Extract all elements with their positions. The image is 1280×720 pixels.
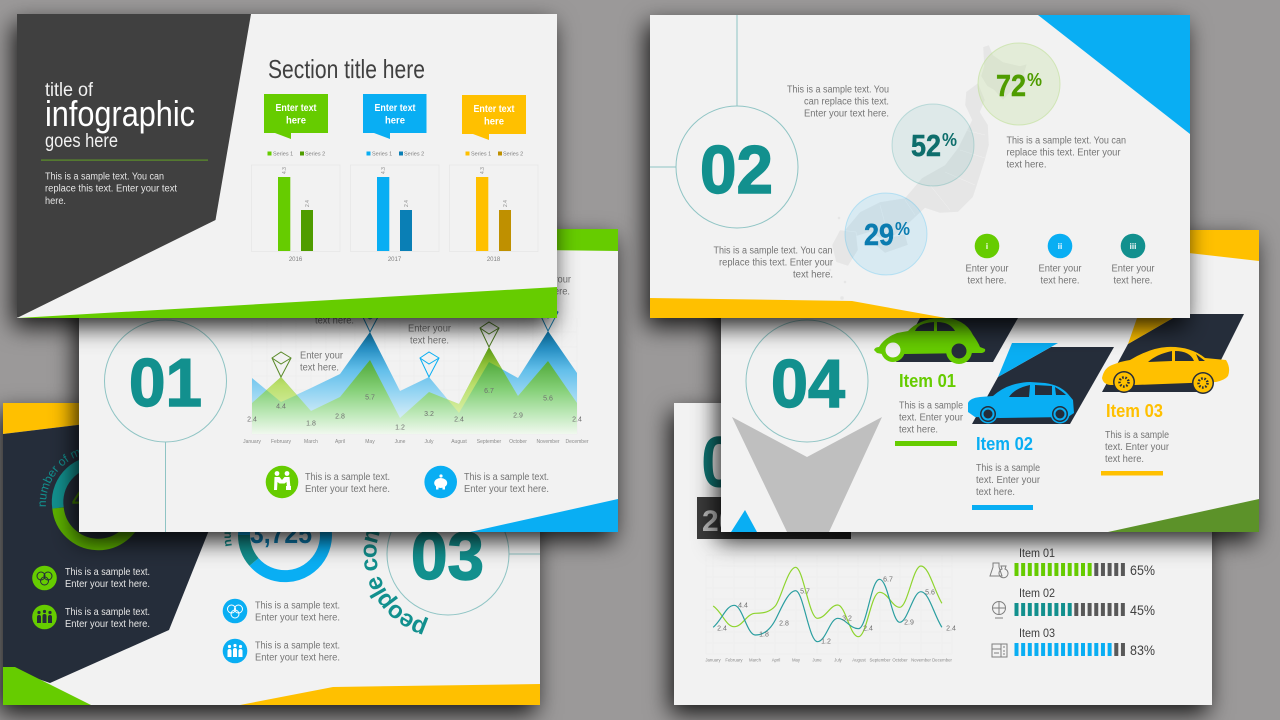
main title: title of [45, 80, 94, 101]
month axis: June [395, 439, 406, 445]
progress item 01: Item 01 [1019, 546, 1055, 560]
series: teal line [713, 579, 942, 642]
area chart [243, 318, 589, 445]
intro text: replace this text. Enter your text [45, 184, 177, 194]
item 03: text. Enter your [1105, 442, 1170, 453]
note: upper left [787, 84, 889, 120]
callout: green: Enter text [276, 103, 317, 114]
month axis: August [852, 658, 866, 662]
bar chart 2018 [450, 152, 538, 263]
value labels: 5.6 [543, 396, 553, 402]
donut: 3,725: 3,725 [250, 518, 312, 549]
bar chart 2018: Series 2 [503, 152, 523, 158]
text: members note 2: Enter your text here. [65, 619, 150, 630]
item 02 [972, 434, 1041, 510]
month axis: April [772, 658, 780, 662]
slide 05: line chart and progress items [674, 403, 1212, 705]
progress item 01 [990, 546, 1155, 578]
value labels [247, 388, 582, 432]
value labels: 5.7 [800, 588, 810, 596]
month axis: December [932, 658, 952, 662]
month axis: April [335, 439, 345, 445]
legend ii: text here. [1040, 276, 1080, 286]
intro text [45, 172, 177, 207]
icon: coins blue [223, 599, 247, 623]
month axis: October [892, 658, 908, 662]
main title [45, 80, 195, 152]
note: May: Enter your [312, 303, 356, 314]
circle badge 04: 04 [771, 346, 845, 422]
month axis [243, 439, 589, 445]
slide 04: cars [721, 230, 1259, 532]
bubble 52%: 52 [911, 128, 941, 163]
legend iii: text here. [1114, 276, 1152, 286]
value labels: 2.8 [779, 620, 789, 628]
intro text: here. [45, 196, 66, 207]
item 02: This is a sample [976, 463, 1040, 474]
progress item 03 [992, 626, 1155, 658]
legend i: i [986, 242, 988, 251]
bubble 29%: % [895, 219, 910, 239]
pin: February [272, 352, 291, 377]
progress item 02 [992, 586, 1155, 618]
note: May: text here. [315, 316, 354, 326]
icon: green car [874, 317, 985, 364]
month axis: January [243, 439, 261, 445]
value labels: 1.8 [306, 420, 316, 428]
month axis: March [304, 439, 318, 445]
yellow bottom band [650, 298, 946, 318]
blue corner [470, 499, 618, 532]
highlight: September slope [448, 347, 502, 413]
text: bottom note 1 [305, 472, 390, 495]
month axis: August [451, 439, 467, 445]
circle badge 02 [650, 15, 798, 228]
icon: yellow car [1102, 347, 1229, 394]
navy panel [3, 403, 260, 683]
icon: blue car [968, 382, 1074, 424]
item 03: text here. [1105, 454, 1144, 465]
circle badge 03: 03 [411, 518, 484, 594]
legend i: text here. [968, 276, 1006, 286]
circle badge 01: 01 [129, 345, 202, 421]
value labels: 4.4 [276, 404, 286, 410]
note: February: text here. [300, 362, 339, 374]
icon: coins green [32, 566, 57, 590]
callout: yellow [462, 95, 526, 140]
green divider [41, 160, 208, 161]
note: February [300, 350, 344, 374]
bar chart 2018: 4.3 [480, 167, 486, 174]
hidden note text: Enter your [528, 274, 572, 286]
bubble 72% [978, 43, 1060, 125]
icon: team blue [223, 639, 247, 663]
bar chart 2016: 4.3 [282, 167, 288, 174]
note: upper left: This is a sample text. You [787, 84, 889, 96]
main title: goes here [45, 131, 118, 152]
donut: 3,725 [244, 494, 326, 576]
green bottom corner [3, 667, 91, 705]
note: right: This is a sample text. You can [1006, 136, 1126, 146]
item 03: Item 03 [1106, 401, 1163, 421]
progress item 02: Item 02 [1019, 586, 1055, 600]
main title: infographic [45, 93, 195, 134]
text: customers note 2 [255, 640, 340, 664]
text: members note 1: Enter your text here. [65, 579, 150, 590]
text: customers note 1: Enter your text here. [255, 612, 340, 624]
text: customers note 2: Enter your text here. [255, 652, 340, 664]
bubble 72%: 72 [996, 68, 1026, 103]
text: customers note 1: This is a sample text. [255, 600, 340, 612]
pin: November [539, 306, 558, 331]
progress item 03: Item 03 [1019, 626, 1055, 640]
value labels [717, 576, 956, 646]
grey chevron [732, 417, 882, 532]
note: July: Enter your [408, 324, 452, 334]
note: February: Enter your [300, 350, 344, 362]
intro text: This is a sample text. You can [45, 172, 164, 182]
green corner [1108, 499, 1259, 532]
value labels: 4.4 [738, 602, 748, 610]
bar chart 2016: Series 2 [305, 152, 325, 158]
month axis: September [477, 439, 502, 445]
bar chart 2017: 2017 [388, 257, 402, 263]
slide title: infographic title and bar charts [17, 14, 557, 318]
value labels: 3.2 [842, 616, 852, 622]
text: customers note 2: This is a sample text. [255, 640, 340, 652]
text: members note 1: This is a sample text. [65, 567, 150, 578]
bar chart 2017: 2.4 [404, 200, 410, 207]
bar chart 2016: Series 1 [273, 152, 293, 158]
text: bottom note 1: This is a sample text. [305, 472, 390, 483]
callout: blue [363, 94, 426, 139]
pin: May [361, 307, 380, 332]
legend iii: Enter your [1112, 264, 1155, 274]
icon: team green [32, 605, 57, 629]
progress item 01: 65% [1130, 562, 1155, 578]
month axis: May [365, 439, 375, 445]
value labels: 1.8 [759, 632, 769, 638]
yellow top band [1180, 230, 1259, 261]
series: blue area [252, 331, 577, 434]
blue accent [998, 343, 1058, 377]
pin: July [420, 352, 439, 377]
callout: green [264, 94, 328, 139]
note: upper left: Enter your text here. [804, 108, 889, 120]
note: lower left: replace this text. Enter your [719, 258, 834, 268]
legend ii: Enter your [1038, 264, 1082, 274]
bar chart 2016 [252, 152, 340, 263]
progress item 03: 83% [1130, 642, 1155, 658]
blue triangle [731, 510, 757, 532]
month axis: February [271, 439, 291, 445]
item 01: text here. [899, 424, 938, 436]
month axis: September [869, 658, 891, 662]
legend ii: ii [1058, 242, 1062, 251]
item 01 [895, 371, 964, 446]
value labels: 2.4 [572, 416, 582, 424]
circle badge 01 [104, 320, 226, 532]
bar chart 2018: 2018 [487, 257, 501, 263]
blue corner [1038, 15, 1190, 134]
month axis: November [911, 658, 931, 662]
callout: green: here [286, 116, 306, 126]
value labels: 6.7 [484, 388, 494, 395]
parallelogram 1 [896, 318, 1018, 362]
month axis: July [425, 439, 434, 445]
pin: September [480, 322, 499, 347]
progress item 02: 45% [1130, 602, 1155, 618]
value labels: 2.4 [946, 626, 956, 632]
bar chart 2017 [350, 152, 439, 263]
circle badge 02: 02 [700, 132, 773, 208]
value labels: 5.7 [365, 394, 375, 402]
text: bottom note 2 [464, 472, 549, 495]
green bottom band [18, 287, 557, 318]
month axis: July [834, 658, 843, 662]
bar chart 2017: Series 1 [372, 152, 392, 158]
text: bottom note 2: Enter your text here. [464, 484, 549, 495]
note: lower left [714, 246, 834, 280]
donut: number of members: 4,520 [72, 487, 127, 512]
item 02: text here. [976, 487, 1015, 498]
legend i [966, 234, 1009, 286]
text: members note 2 [65, 607, 150, 630]
month axis [705, 658, 952, 662]
note: July [408, 324, 452, 346]
item 02: Item 02 [976, 434, 1033, 454]
bar chart 2016: 2.4 [305, 200, 311, 207]
value labels: 2.4 [717, 626, 727, 632]
bubble 29%: 29 [864, 217, 894, 252]
callout: yellow: Enter text [474, 104, 515, 115]
section title: Section title here [268, 54, 425, 84]
note: July: text here. [410, 336, 449, 346]
map of Japan [828, 45, 1028, 300]
parallelogram 2 [972, 347, 1114, 424]
value labels: 2.9 [904, 620, 914, 626]
item 01: This is a sample [899, 400, 963, 412]
bubble 72%: % [1027, 70, 1042, 90]
line chart [705, 555, 956, 662]
text: members note 2: This is a sample text. [65, 607, 150, 618]
text: bottom note 1: Enter your text here. [305, 484, 390, 495]
month axis: October [509, 439, 527, 445]
value labels: 2.9 [513, 412, 523, 420]
slide 02: Japan map percentages [650, 15, 1190, 318]
dark title panel [17, 14, 251, 318]
item 03 [1101, 401, 1170, 476]
value labels: 2.4 [454, 416, 464, 424]
bar chart 2018: Series 1 [471, 152, 491, 158]
item 02: text. Enter your [976, 475, 1041, 486]
slide 03: people and members [0, 394, 554, 720]
icon: handshake [266, 466, 298, 498]
hidden note text: text here. [531, 286, 570, 298]
text: members note 1 [65, 567, 150, 590]
hidden note text [528, 274, 572, 298]
donut: number of members [58, 462, 138, 544]
highlight: February peak [266, 377, 297, 402]
month axis: January [705, 658, 721, 662]
circle badge 04 [746, 320, 868, 442]
parallelogram 3 [1102, 314, 1244, 392]
note: right: text here. [1006, 160, 1046, 170]
bar chart 2017: Series 2 [404, 152, 424, 158]
legend ii [1038, 234, 1082, 286]
text: bottom note 2: This is a sample text. [464, 472, 549, 483]
bar chart 2018: 2.4 [503, 200, 509, 207]
legend i: Enter your [966, 264, 1009, 274]
yellow bottom band [240, 684, 540, 705]
big number: 05 [701, 423, 774, 503]
note: right [1006, 136, 1126, 170]
slide 01: area chart [79, 229, 618, 532]
value labels: 2.4 [247, 416, 257, 424]
bubble 29% [845, 193, 927, 275]
yellow accent [1128, 318, 1173, 344]
series: green area [252, 347, 577, 434]
dark year box [697, 497, 851, 539]
month axis: February [725, 658, 743, 662]
month axis: June [812, 658, 822, 662]
green top band [540, 229, 618, 251]
bubble 52% [892, 104, 974, 186]
callout: blue: here [385, 116, 405, 126]
item 03: This is a sample [1105, 430, 1169, 441]
note: upper left: can replace this text. [804, 96, 889, 108]
value labels: 2.4 [863, 626, 873, 632]
month axis: March [749, 658, 762, 662]
note: May [312, 303, 356, 326]
month axis: December [565, 439, 589, 445]
dark year box: 2017 [702, 505, 769, 538]
value labels: 5.6 [925, 590, 935, 596]
month axis: May [792, 658, 801, 662]
value labels: 1.2 [821, 638, 831, 646]
callout: blue: Enter text [374, 103, 416, 114]
yellow top corner [3, 403, 260, 434]
month axis: November [536, 439, 560, 445]
value labels: 2.8 [335, 414, 345, 420]
legend iii [1112, 234, 1155, 286]
legend iii: iii [1130, 242, 1136, 251]
callout: yellow: here [484, 116, 504, 128]
note: lower left: This is a sample text. You can [714, 246, 832, 256]
bubble 52%: % [942, 130, 957, 150]
bar chart 2016: 2016 [289, 257, 303, 263]
note: lower left: text here. [793, 270, 833, 280]
text: customers note 1 [255, 600, 340, 624]
value labels: 1.2 [395, 424, 405, 432]
value labels: 6.7 [883, 576, 893, 584]
curved label: number of members: number of members [40, 450, 79, 506]
series: green line [713, 566, 942, 637]
item 01: text. Enter your [899, 412, 964, 424]
bar chart 2017: 4.3 [381, 167, 387, 174]
value labels: 3.2 [424, 411, 434, 418]
item 01: Item 01 [899, 371, 956, 391]
icon: piggy bank [424, 466, 457, 498]
circle badge 03 [387, 493, 540, 615]
note: right: replace this text. Enter your [1006, 148, 1121, 158]
